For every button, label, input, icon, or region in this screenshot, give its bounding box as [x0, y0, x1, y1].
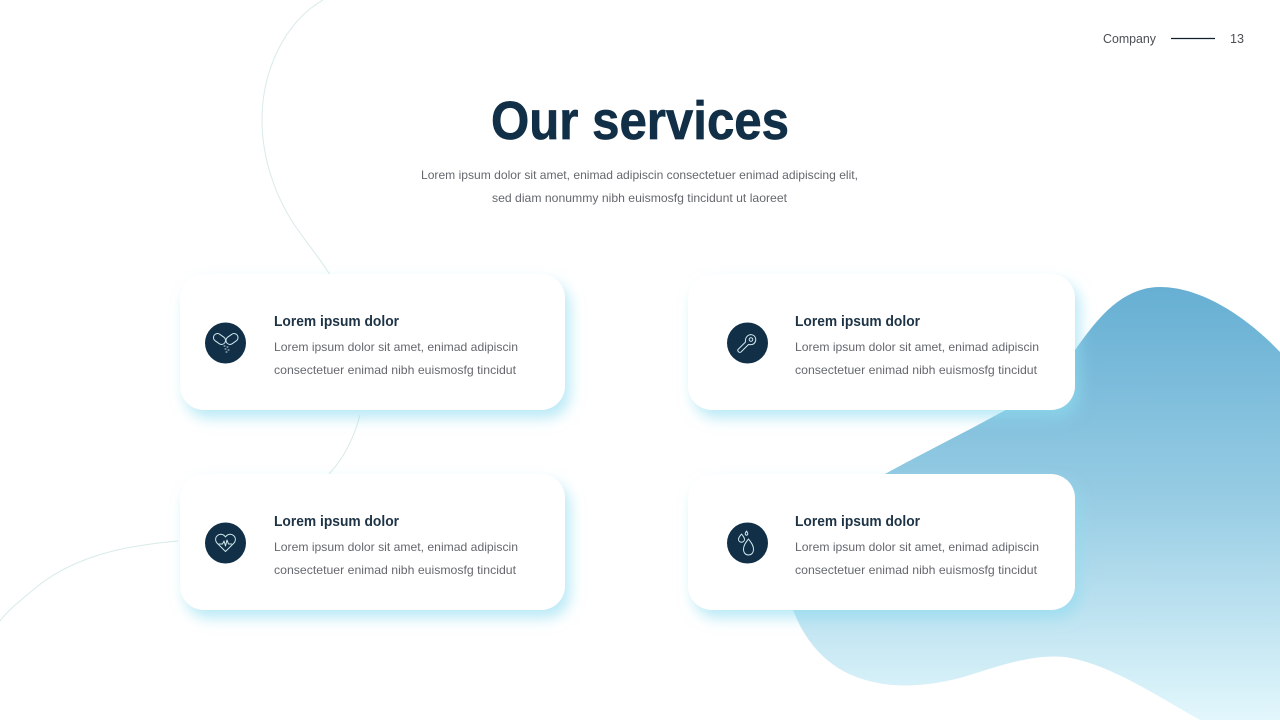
- heading: Lorem ipsum dolor: [795, 513, 920, 530]
- body text: [795, 340, 1039, 377]
- subtitle: [421, 168, 858, 205]
- body text: Lorem ipsum dolor sit amet, enimad adipiscin: [795, 340, 1039, 354]
- body text: consectetuer enimad nibh euismosfg tincidut: [795, 363, 1038, 377]
- heading: Lorem ipsum dolor: [274, 513, 399, 530]
- decorative curved line: bottom left: [0, 541, 178, 621]
- subtitle: Lorem ipsum dolor sit amet, enimad adipiscin consectetuer enimad adipiscing elit,: [421, 168, 858, 182]
- card: capsule service: [180, 274, 565, 410]
- body text: Lorem ipsum dolor sit amet, enimad adipiscin: [274, 340, 518, 354]
- body text: consectetuer enimad nibh euismosfg tincidut: [795, 563, 1038, 577]
- icon: capsules: [205, 322, 246, 364]
- header: company and page number: 13: [1230, 32, 1244, 46]
- icon: heart with pulse: [205, 522, 246, 564]
- body text: Lorem ipsum dolor sit amet, enimad adipiscin: [274, 540, 518, 554]
- decorative curved line: middle: [329, 415, 360, 474]
- icon: instrument: [727, 322, 768, 364]
- subtitle: sed diam nonummy nibh euismosfg tincidunt ut laoreet: [492, 191, 788, 205]
- body text: Lorem ipsum dolor sit amet, enimad adipiscin: [795, 540, 1039, 554]
- decorative curved line: top: [262, 0, 330, 275]
- background blob: [780, 287, 1280, 720]
- heading: Lorem ipsum dolor: [274, 313, 399, 330]
- body text: consectetuer enimad nibh euismosfg tincidut: [274, 563, 517, 577]
- header: company and page number: Company: [1103, 32, 1157, 46]
- body text: [274, 540, 518, 577]
- body text: [274, 340, 518, 377]
- card: instrument service: [688, 274, 1075, 410]
- body text: [795, 540, 1039, 577]
- card: drops service: [688, 474, 1075, 610]
- title: Our services: [491, 91, 789, 151]
- heading: Lorem ipsum dolor: [795, 313, 920, 330]
- icon: water drops: [727, 522, 768, 564]
- card: heart rate service: [180, 474, 565, 610]
- body text: consectetuer enimad nibh euismosfg tincidut: [274, 363, 517, 377]
- header: company and page number: [1103, 32, 1244, 46]
